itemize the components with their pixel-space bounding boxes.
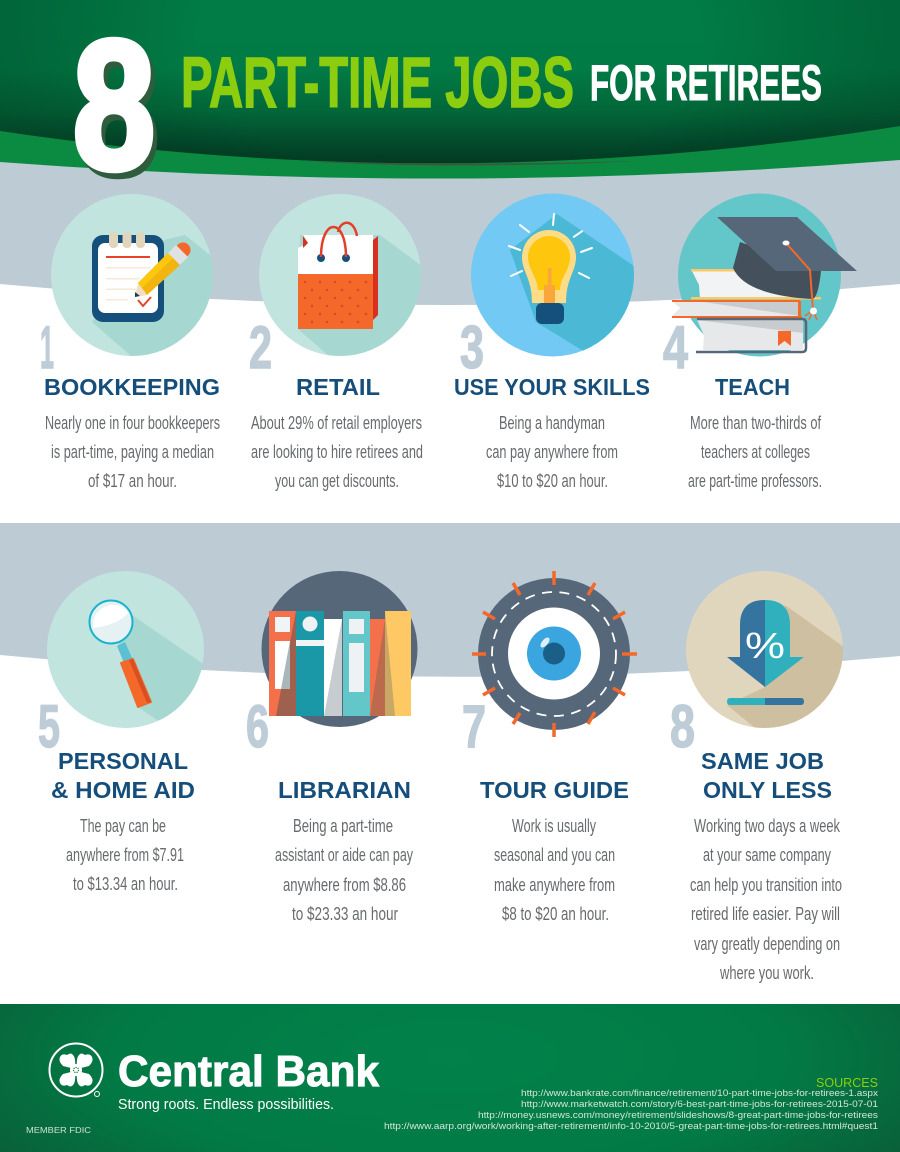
tagline: Strong roots. Endless possibilities.	[118, 1096, 334, 1113]
description	[486, 413, 618, 491]
description: can pay anywhere from	[486, 442, 618, 462]
description: Working two days a week	[694, 816, 841, 836]
heading: TEACH	[715, 374, 790, 400]
heading	[701, 748, 832, 803]
sources: http://money.usnews.com/money/retirement/slideshows/8-great-part-time-jobs-for-retirees	[478, 1110, 878, 1121]
heading: SAME JOB	[701, 748, 824, 774]
description	[688, 413, 822, 491]
description: make anywhere from	[494, 875, 615, 895]
big number 8: 8	[73, 2, 155, 207]
description: can help you transition into	[690, 875, 842, 895]
description: retired life easier. Pay will	[691, 904, 840, 924]
number 3: 3	[460, 314, 484, 381]
panel: librarian	[246, 571, 418, 924]
description: assistant or aide can pay	[275, 845, 413, 865]
sources: SOURCES	[816, 1075, 878, 1090]
heading: ONLY LESS	[703, 777, 832, 803]
icon: notepad and pencil	[51, 194, 213, 356]
description	[66, 816, 184, 894]
icon: light bulb	[471, 194, 634, 356]
heading: BOOKKEEPING	[44, 374, 220, 400]
description: Being a handyman	[499, 413, 605, 433]
description: you can get discounts.	[275, 471, 399, 491]
description: More than two-thirds of	[690, 413, 822, 433]
description: are part-time professors.	[688, 471, 822, 491]
icon: shopping bag	[259, 194, 421, 356]
description: are looking to hire retirees and	[251, 442, 423, 462]
description	[251, 413, 423, 491]
panel: teach	[663, 194, 857, 491]
description: to $13.34 an hour.	[73, 874, 178, 894]
description: where you work.	[719, 963, 814, 983]
description: is part-time, paying a median	[51, 442, 214, 462]
heading: LIBRARIAN	[278, 777, 411, 803]
description: $10 to $20 an hour.	[497, 471, 608, 491]
description: at your same company	[703, 845, 831, 865]
logo wordmark: Central Bank	[118, 1047, 379, 1096]
description	[45, 413, 220, 491]
description: $8 to $20 an hour.	[502, 904, 609, 924]
description: seasonal and you can	[494, 845, 615, 865]
heading: USE YOUR SKILLS	[454, 374, 650, 400]
icon: percent down arrow: %	[745, 625, 785, 666]
panel: personal and home aid	[38, 571, 215, 894]
big number 8: 8	[77, 8, 159, 213]
description: Nearly one in four bookkeepers	[45, 413, 220, 433]
description	[275, 816, 413, 924]
header banner	[0, 0, 900, 179]
sources	[384, 1075, 878, 1132]
panel: bookkeeping	[40, 194, 225, 491]
panel: retail	[249, 194, 430, 491]
icon: percent down arrow	[686, 571, 843, 728]
heading: TOUR GUIDE	[480, 777, 629, 803]
icon: eye and road	[472, 571, 637, 737]
description: to $23.33 an hour	[292, 904, 398, 924]
number 8: 8	[670, 693, 695, 760]
logo: clover in circle	[50, 1044, 102, 1096]
description	[690, 816, 842, 983]
title	[73, 2, 822, 213]
description	[494, 816, 615, 924]
description: vary greatly depending on	[694, 934, 840, 954]
icon: graduation cap and books	[672, 194, 857, 356]
panel: same job only less	[670, 571, 855, 983]
sources: http://www.aarp.org/work/working-after-retirement/info-10-2010/5-great-part-time-jobs-for-retirees.html#quest1	[384, 1121, 878, 1132]
footer	[0, 1004, 900, 1152]
number 4: 4	[663, 314, 688, 381]
heading: & HOME AID	[51, 777, 195, 803]
description: anywhere from $7.91	[66, 845, 184, 865]
heading: RETAIL	[296, 374, 380, 400]
panel: tour guide	[462, 571, 637, 924]
description: teachers at colleges	[701, 442, 810, 462]
description: anywhere from $8.86	[283, 875, 406, 895]
number 2: 2	[249, 314, 272, 381]
panel: use your skills	[454, 194, 650, 491]
number 6: 6	[246, 693, 269, 760]
icon: row of books	[262, 571, 418, 727]
sources: http://www.bankrate.com/finance/retirement/10-part-time-jobs-for-retirees-1.aspx	[521, 1088, 878, 1099]
description: Being a part-time	[293, 816, 393, 836]
icon: magnifying glass	[47, 571, 204, 728]
description: About 29% of retail employers	[251, 413, 422, 433]
number 7: 7	[462, 693, 486, 760]
sources: http://www.marketwatch.com/story/6-best-part-time-jobs-for-retirees-2015-07-01	[521, 1099, 878, 1110]
member fdic: MEMBER FDIC	[26, 1125, 91, 1135]
heading: PERSONAL	[58, 748, 188, 774]
title line: part-time jobs: PART-TIME JOBS	[181, 44, 574, 123]
description: The pay can be	[80, 816, 166, 836]
heading	[51, 748, 195, 803]
description: of $17 an hour.	[88, 471, 177, 491]
description: Work is usually	[512, 816, 596, 836]
panel: bookkeeping: 1	[40, 314, 54, 381]
number 5: 5	[38, 693, 60, 760]
